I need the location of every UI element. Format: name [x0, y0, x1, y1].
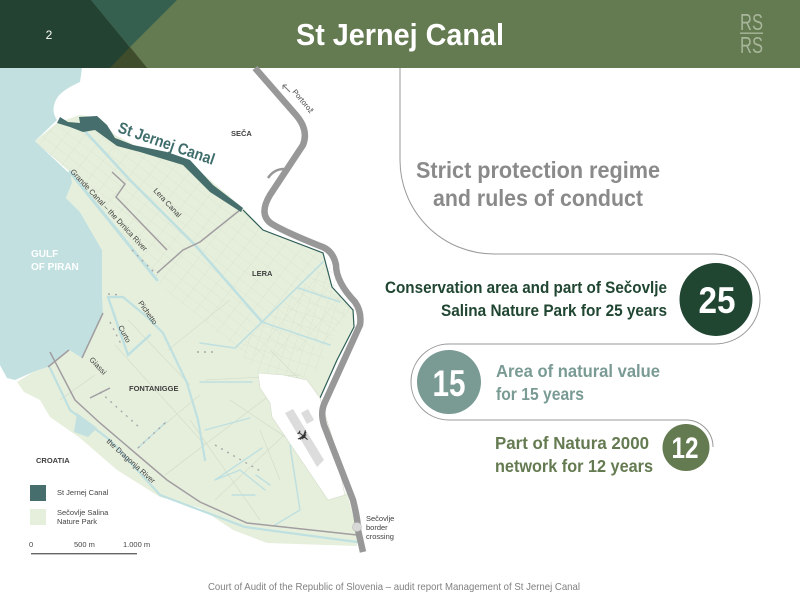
scale bar: 500 m — [74, 540, 95, 549]
icon: airplane: ✈ — [290, 425, 314, 449]
scale bar: 1.000 m — [123, 540, 150, 549]
title: St Jernej Canal — [296, 17, 504, 52]
connecting outline — [400, 68, 760, 447]
footer: Court of Audit of the Republic of Slovenia – audit report Management of St Jernej Canal — [208, 581, 580, 593]
item: 15 years: 15 — [432, 363, 466, 404]
item: 12 years: Part of Natura 2000 — [495, 433, 649, 453]
airport apron — [258, 373, 345, 500]
item: 15 years: Area of natural value — [496, 361, 660, 381]
map labels: Lera Canal — [152, 186, 183, 219]
field paths — [60, 300, 320, 520]
legend: St Jernej Canal — [57, 488, 109, 497]
field grid — [39, 124, 350, 358]
map labels: Curto — [116, 324, 133, 344]
map labels: crossing — [366, 532, 394, 541]
gulf label: GULF — [31, 249, 58, 260]
legend — [30, 485, 109, 526]
map — [0, 68, 400, 552]
logo: RS — [740, 9, 763, 35]
salina nature park land — [17, 115, 357, 546]
item: 12 years — [495, 424, 710, 476]
map labels: LERA — [252, 269, 273, 278]
dikes — [48, 172, 357, 535]
road — [255, 68, 363, 552]
map labels: SEČA — [231, 129, 252, 138]
legend: Sečovlje Salina — [57, 508, 109, 517]
gulf label: OF PIRAN — [31, 262, 79, 273]
map labels: Sečovlje — [366, 514, 394, 523]
scale bar — [29, 540, 150, 554]
salt pan — [74, 413, 97, 437]
map labels: Portorož — [290, 88, 316, 115]
canal-side marks — [100, 250, 262, 472]
runway — [285, 409, 324, 467]
item: 25 years: Conservation area and part of Sečovlje — [385, 279, 667, 297]
heading: strict protection: and rules of conduct — [433, 185, 643, 211]
header bar — [0, 0, 800, 68]
canal name label: St Jernej Canal — [116, 120, 217, 169]
logo — [740, 9, 763, 58]
map labels — [36, 88, 394, 541]
map labels: FONTANIGGE — [129, 384, 178, 393]
map labels: Giassi — [88, 355, 109, 377]
map labels: Grande Canal – the Drnica River — [69, 167, 150, 253]
map labels: border — [366, 523, 388, 532]
item: 25 years: Salina Nature Park for 25 years — [441, 302, 667, 320]
item: 15 years: for 15 years — [496, 384, 584, 404]
item: 25 years: 25 — [698, 280, 736, 321]
canals — [50, 128, 357, 542]
st jernej canal — [57, 116, 243, 212]
item: 25 years — [385, 263, 752, 336]
item: 12 years: network for 12 years — [495, 456, 653, 476]
logo: RS — [740, 32, 763, 58]
item: 15 years — [417, 350, 660, 414]
map labels: CROATIA — [36, 456, 70, 465]
map labels: Pichetto — [136, 299, 159, 326]
sea — [0, 68, 103, 380]
item: 12 years: 12 — [672, 432, 698, 465]
page number: 2 — [46, 28, 53, 42]
legend: Nature Park — [57, 517, 97, 526]
scale bar: 0 — [29, 540, 33, 549]
heading: strict protection: Strict protection regime — [416, 157, 660, 183]
border crossing marker — [352, 522, 362, 532]
map labels: the Dragonja River — [105, 437, 158, 486]
heading: strict protection — [416, 157, 660, 211]
